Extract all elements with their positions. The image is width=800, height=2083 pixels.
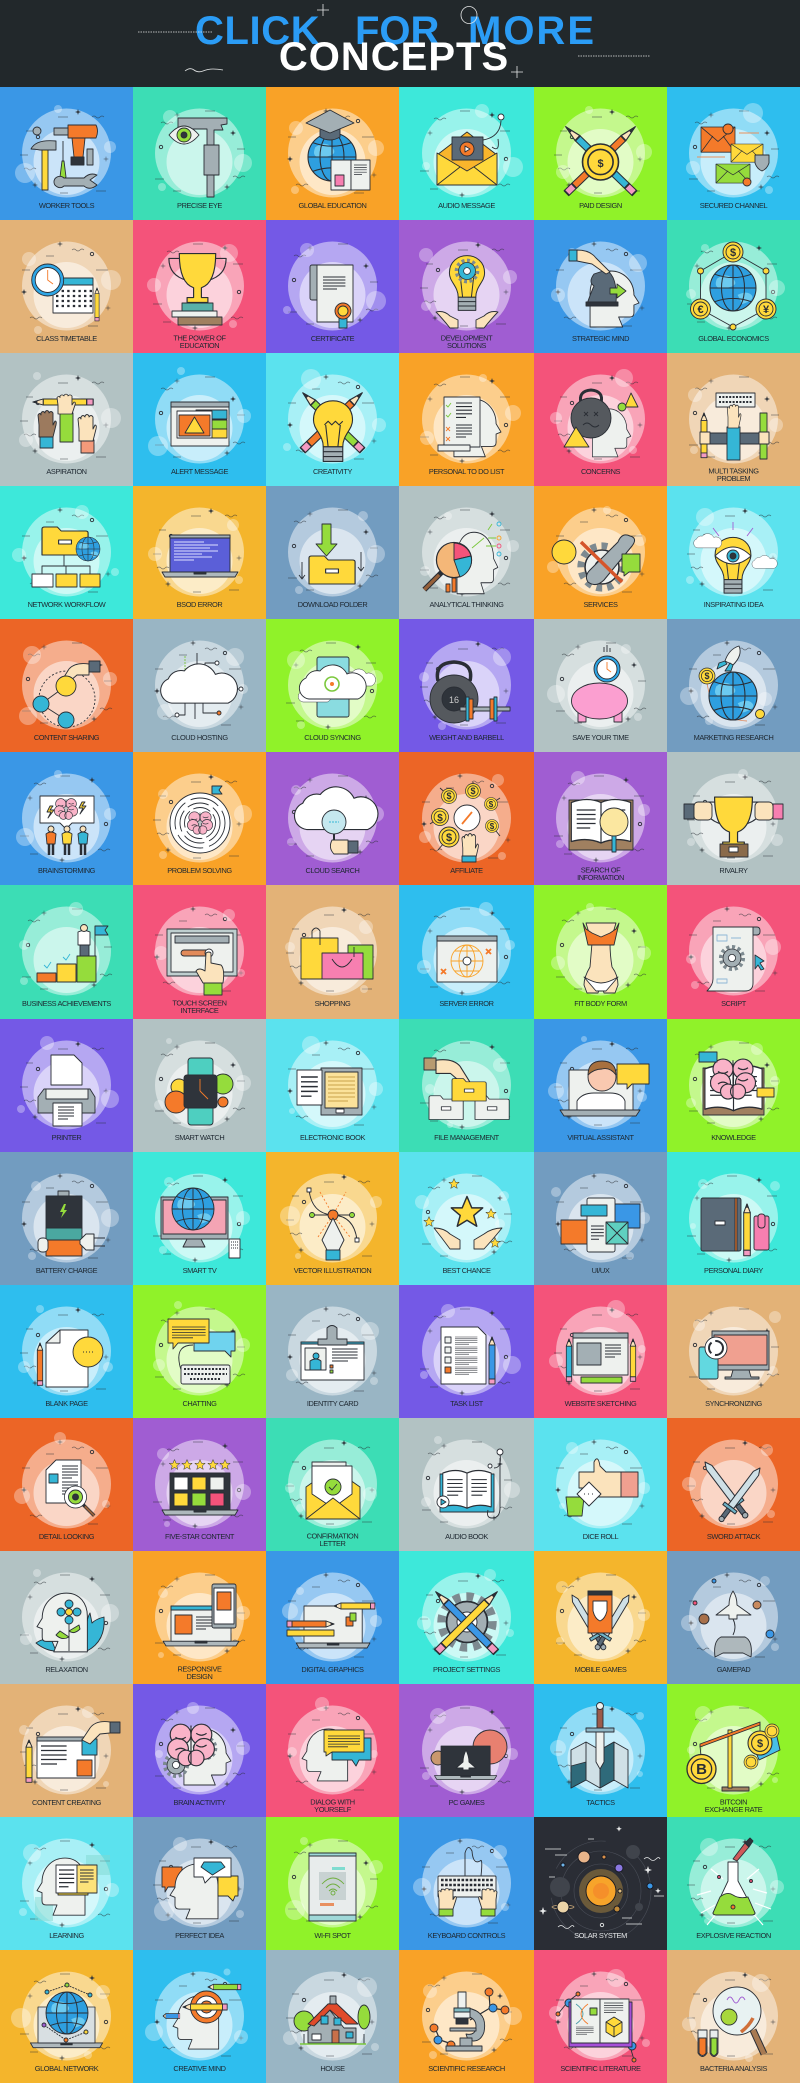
label: CREATIVE MIND xyxy=(173,2064,226,2073)
icon: ui devices xyxy=(561,1198,640,1252)
label: BRAINSTORMING xyxy=(38,866,96,875)
label: DEVELOPMENT xyxy=(441,334,493,343)
label line 2: LETTER xyxy=(320,1539,346,1548)
panel: keyboard controls xyxy=(399,1817,534,1951)
panel: services xyxy=(534,486,667,620)
icon: head target pencil xyxy=(163,1984,241,2049)
label: DETAIL LOOKING xyxy=(39,1532,95,1541)
panel: smart watch xyxy=(133,1019,266,1153)
label: ELECTRONIC BOOK xyxy=(300,1133,365,1142)
label: ALERT MESSAGE xyxy=(171,467,228,476)
icon: clock and calendar xyxy=(32,264,99,321)
panel: cloud search xyxy=(266,752,400,886)
icon: certificate xyxy=(310,265,353,328)
panel: aspiration xyxy=(0,353,133,487)
icon: folder network xyxy=(32,527,100,587)
panel: download folder xyxy=(266,486,400,620)
panel: relaxation xyxy=(0,1551,133,1685)
panel: scientific literature xyxy=(534,1950,667,2083)
icon: diary pen xyxy=(701,1198,769,1256)
icon: assistant on laptop xyxy=(560,1061,649,1116)
label: BLANK PAGE xyxy=(45,1399,88,1408)
icon: script scroll with gear xyxy=(707,927,764,991)
icon: balance with coins xyxy=(687,1722,780,1791)
icon: globe with currencies xyxy=(690,242,776,330)
label line 2: INTERFACE xyxy=(181,1006,219,1015)
label: PAID DESIGN xyxy=(579,201,622,210)
icon: globe with currencies: $ xyxy=(730,247,736,259)
label line 2: PROBLEM xyxy=(717,474,750,483)
icon: head and book xyxy=(35,1855,110,1921)
icon: hands keyboard pencil ruler xyxy=(700,393,769,460)
icon: coins and link: $ xyxy=(446,791,452,801)
panel: creativity xyxy=(266,353,400,487)
icon: fit torso xyxy=(583,923,619,993)
panel: bitcoin exchange rate xyxy=(667,1684,800,1818)
icon: chat bubbles and keyboard xyxy=(168,1319,235,1384)
panel: five-star content xyxy=(133,1418,266,1552)
title: click for more: CLICK xyxy=(195,9,320,53)
label: SCIENTIFIC LITERATURE xyxy=(560,2064,641,2073)
label: MULTI TASKING xyxy=(708,467,759,476)
panel: cloud syncing xyxy=(266,619,400,753)
icon: pen pencil coin: $ xyxy=(597,158,604,170)
label: CLASS TIMETABLE xyxy=(36,334,97,343)
panel: business achievements xyxy=(0,885,133,1019)
label: SYNCHRONIZING xyxy=(705,1399,763,1408)
label: IDENTITY CARD xyxy=(307,1399,358,1408)
icon: hand rolling dice xyxy=(566,1459,638,1516)
label line 2: EDUCATION xyxy=(180,341,219,350)
icon: globe with currencies: ¥ xyxy=(763,304,770,316)
icon: maze brain flag xyxy=(170,786,230,853)
label: CONTENT CREATING xyxy=(32,1798,102,1807)
panel: network workflow xyxy=(0,486,133,620)
panel: worker tools xyxy=(0,87,133,221)
panel: shopping xyxy=(266,885,400,1019)
panel: content creating xyxy=(0,1684,133,1818)
panel: mobile games xyxy=(534,1551,667,1685)
panel: multi tasking problem xyxy=(667,353,800,487)
icon: raised hands and pencil xyxy=(33,394,96,453)
label: AUDIO BOOK xyxy=(445,1532,488,1541)
icon: smart tv and globe xyxy=(161,1188,240,1258)
icon: id card xyxy=(301,1326,364,1380)
icon: tablet wifi xyxy=(309,1853,356,1921)
panel: synchronizing xyxy=(667,1285,800,1419)
panel: affiliate xyxy=(399,752,534,886)
label: PERSONAL TO DO LIST xyxy=(429,467,505,476)
panel: blank page xyxy=(0,1285,133,1419)
icon: people and idea xyxy=(40,796,94,855)
icon: balance with coins: B xyxy=(696,1761,707,1778)
icon: laptop, planets, rocket xyxy=(431,1730,507,1780)
panel: the power of education xyxy=(133,220,266,354)
label: BUSINESS ACHIEVEMENTS xyxy=(22,999,111,1008)
label: AUDIO MESSAGE xyxy=(438,201,495,210)
icon: bulb with crossed pencils xyxy=(300,390,365,461)
panel: solar system xyxy=(534,1817,667,1951)
panel: dialog with yourself xyxy=(266,1684,400,1818)
label line 2: SOLUTIONS xyxy=(447,341,487,350)
label: WEBSITE SKETCHING xyxy=(565,1399,637,1408)
label: SEARCH OF xyxy=(581,866,621,875)
label: GLOBAL EDUCATION xyxy=(299,201,367,210)
panel: project settings xyxy=(399,1551,534,1685)
icon: coins and link xyxy=(430,782,500,862)
label: SHOPPING xyxy=(315,999,351,1008)
label: FIT BODY FORM xyxy=(574,999,627,1008)
icon: responsive devices xyxy=(163,1584,239,1646)
panel: certificate xyxy=(266,220,400,354)
label: VIRTUAL ASSISTANT xyxy=(567,1133,634,1142)
icon: bulb with eye and clouds xyxy=(694,522,777,593)
icon: map and sword xyxy=(571,1702,628,1788)
label: VECTOR ILLUSTRATION xyxy=(294,1266,371,1275)
panel: touch screen interface xyxy=(133,885,266,1019)
icon: head, brain, gears xyxy=(165,1724,231,1785)
label: HOUSE xyxy=(320,2064,345,2073)
label: BACTERIA ANALYSIS xyxy=(700,2064,767,2073)
panel: task list xyxy=(399,1285,534,1419)
icon: globe, cap, book xyxy=(306,110,370,190)
panel: detail looking xyxy=(0,1418,133,1552)
icon: coins and link: $ xyxy=(446,832,452,844)
label: PROBLEM SOLVING xyxy=(167,866,232,875)
label: WEIGHT AND BARBELL xyxy=(429,733,504,742)
label: SECURED CHANNEL xyxy=(700,201,768,210)
icon: head and dialog xyxy=(302,1729,371,1781)
panel: bacteria analysis xyxy=(667,1950,800,2083)
label: CHATTING xyxy=(182,1399,217,1408)
panel: server error xyxy=(399,885,534,1019)
panel: save your time xyxy=(534,619,667,753)
icon: trophy held by two hands xyxy=(684,797,783,857)
header ornaments xyxy=(138,4,650,78)
panel: sword attack xyxy=(667,1418,800,1552)
label: CLOUD SEARCH xyxy=(306,866,360,875)
panel: identity card xyxy=(266,1285,400,1419)
label: DIALOG WITH xyxy=(310,1798,355,1807)
label: SERVICES xyxy=(583,600,618,609)
label: RESPONSIVE xyxy=(177,1665,222,1674)
panel: cloud hosting xyxy=(133,619,266,753)
label: PROJECT SETTINGS xyxy=(433,1665,500,1674)
panel: fit body form xyxy=(534,885,667,1019)
icon: spaceship and gamepad xyxy=(693,1579,774,1657)
panel: personal diary xyxy=(667,1152,800,1286)
label: PC GAMES xyxy=(449,1798,485,1807)
label: BSOD ERROR xyxy=(177,600,222,609)
label: TACTICS xyxy=(586,1798,615,1807)
icon: kettlebell and warning xyxy=(564,390,638,457)
label: SCIENTIFIC RESEARCH xyxy=(428,2064,505,2073)
icon: head with chess knight xyxy=(569,250,639,327)
label: WORKER TOOLS xyxy=(39,201,95,210)
panel: audio message xyxy=(399,87,534,221)
panel: wi-fi spot xyxy=(266,1817,400,1951)
label: AFFILIATE xyxy=(450,866,483,875)
icon: task list page xyxy=(441,1327,495,1384)
label: PERSONAL DIARY xyxy=(704,1266,763,1275)
icon: star in hands xyxy=(424,1178,502,1249)
panel: bsod error xyxy=(133,486,266,620)
panel: precise eye xyxy=(133,87,266,221)
panel: perfect idea xyxy=(133,1817,266,1951)
label: DIGITAL GRAPHICS xyxy=(301,1665,364,1674)
panel: weight and barbell xyxy=(399,619,534,753)
panel: explosive reaction xyxy=(667,1817,800,1951)
label: SMART TV xyxy=(183,1266,217,1275)
panel: brain activity xyxy=(133,1684,266,1818)
icon: house with trees xyxy=(294,1996,370,2044)
panel: dice roll xyxy=(534,1418,667,1552)
icon: phone and swords xyxy=(566,1591,635,1653)
label: SOLAR SYSTEM xyxy=(574,1931,627,1940)
header band xyxy=(0,0,800,88)
panel: inspirating idea xyxy=(667,486,800,620)
label: STRATEGIC MIND xyxy=(572,334,629,343)
label: RELAXATION xyxy=(45,1665,88,1674)
panel: paid design xyxy=(534,87,667,221)
label: ASPIRATION xyxy=(46,467,87,476)
panel: knowledge xyxy=(667,1019,800,1153)
icon: website sketch xyxy=(566,1333,636,1383)
title: click for more: MORE xyxy=(468,9,596,53)
icon: balance with coins: $ xyxy=(757,1738,763,1750)
label: PRECISE EYE xyxy=(177,201,222,210)
panel: electronic book xyxy=(266,1019,400,1153)
panel: global network xyxy=(0,1950,133,2083)
icon: coins and link: $ xyxy=(490,822,495,831)
icon: document magnifier xyxy=(46,1460,94,1516)
panel: creative mind xyxy=(133,1950,266,2083)
icon: piggy bank and clock xyxy=(572,645,628,722)
panel: class timetable xyxy=(0,220,133,354)
label: SWORD ATTACK xyxy=(707,1532,761,1541)
label: CONCERNS xyxy=(581,467,621,476)
panel: ui/ux xyxy=(534,1152,667,1286)
panel: personal to do list xyxy=(399,353,534,487)
label: EXPLOSIVE REACTION xyxy=(696,1931,771,1940)
label: TOUCH SCREEN xyxy=(172,999,227,1008)
label: CERTIFICATE xyxy=(311,334,355,343)
label: BRAIN ACTIVITY xyxy=(174,1798,226,1807)
icon: audio book xyxy=(437,1449,503,1518)
icon: bulb gear hands xyxy=(436,256,498,328)
icon: cloud and magnifier xyxy=(294,787,378,854)
panel: rivalry xyxy=(667,752,800,886)
title: click for more: FOR xyxy=(355,9,440,53)
panel: alert message xyxy=(133,353,266,487)
label: MARKETING RESEARCH xyxy=(694,733,773,742)
icon: coins and link: $ xyxy=(470,786,476,796)
icon: hand and nodes xyxy=(33,661,100,728)
icon: folders and hand xyxy=(424,1058,509,1120)
panel: global education xyxy=(266,87,400,221)
icon: vector pen nib xyxy=(307,1188,359,1260)
label: THE POWER OF xyxy=(173,334,227,343)
icon: book with dna and cube xyxy=(556,1992,636,2062)
icon: five stars laptop xyxy=(162,1460,238,1515)
panel: confirmation letter xyxy=(266,1418,400,1552)
label: SMART WATCH xyxy=(175,1133,224,1142)
icon: coins and link: $ xyxy=(437,813,443,824)
panel: secured channel xyxy=(667,87,800,221)
panel: chatting xyxy=(133,1285,266,1419)
icon: battery and plug xyxy=(38,1191,105,1256)
icon: digital graphics xyxy=(287,1603,375,1648)
label: BITCOIN xyxy=(720,1798,747,1807)
label: TASK LIST xyxy=(450,1399,484,1408)
label: INSPIRATING IDEA xyxy=(704,600,764,609)
label: PERFECT IDEA xyxy=(175,1931,224,1940)
label: CONFIRMATION xyxy=(307,1532,358,1541)
panel: pc games xyxy=(399,1684,534,1818)
label: PRINTER xyxy=(52,1133,81,1142)
label: GAMEPAD xyxy=(717,1665,750,1674)
icon: monitor sync phone xyxy=(699,1331,769,1379)
panel: battery charge xyxy=(0,1152,133,1286)
panel: development solutions xyxy=(399,220,534,354)
icon: book and brain xyxy=(699,1052,774,1115)
panel: smart tv xyxy=(133,1152,266,1286)
panel: strategic mind xyxy=(534,220,667,354)
icon: tablet and finger xyxy=(167,929,237,995)
label: FILE MANAGEMENT xyxy=(434,1133,500,1142)
panel: problem solving xyxy=(133,752,266,886)
panel: gamepad xyxy=(667,1551,800,1685)
icon: smart watch xyxy=(165,1058,233,1125)
label: KEYBOARD CONTROLS xyxy=(428,1931,506,1940)
label line 2: EXCHANGE RATE xyxy=(705,1805,763,1814)
icon: flask and pipette xyxy=(697,1838,771,1925)
label: MOBILE GAMES xyxy=(575,1665,627,1674)
panel: tactics xyxy=(534,1684,667,1818)
icon: microscope and molecules xyxy=(430,1988,509,2051)
icon: head with pie chart xyxy=(424,522,501,594)
icon: bacteria magnifier xyxy=(698,1987,764,2056)
panel: marketing research xyxy=(667,619,800,753)
icon: head, bubbles, diamond xyxy=(162,1858,238,1919)
label: UI/UX xyxy=(592,1266,610,1275)
label: GLOBAL NETWORK xyxy=(35,2064,99,2073)
panel: audio book xyxy=(399,1418,534,1552)
label: CLOUD SYNCING xyxy=(304,733,361,742)
icon: phone and cloud xyxy=(298,657,376,717)
panel: responsive design xyxy=(133,1551,266,1685)
panel: script xyxy=(667,885,800,1019)
label line 2: INFORMATION xyxy=(577,873,624,882)
label: RIVALRY xyxy=(719,866,748,875)
label: WI-FI SPOT xyxy=(314,1931,352,1940)
icon: head with flower xyxy=(36,1593,104,1652)
title: concepts: CONCEPTS xyxy=(279,35,509,79)
label: NETWORK WORKFLOW xyxy=(28,600,106,609)
icon: caliper and eye xyxy=(169,118,227,197)
icon: solar system xyxy=(539,1826,664,1941)
panel: printer xyxy=(0,1019,133,1153)
icon: download folder xyxy=(299,524,364,584)
panel: virtual assistant xyxy=(534,1019,667,1153)
icon: envelopes xyxy=(697,124,769,186)
icon: gear wrench screwdriver xyxy=(552,535,640,588)
icon: e-book tablet xyxy=(297,1068,362,1115)
panel: learning xyxy=(0,1817,133,1951)
label: SCRIPT xyxy=(721,999,747,1008)
panel: scientific research xyxy=(399,1950,534,2083)
label: CONTENT SHARING xyxy=(34,733,100,742)
panel: house xyxy=(266,1950,400,2083)
panel: search of information xyxy=(534,752,667,886)
label: KNOWLEDGE xyxy=(711,1133,756,1142)
icon: page with bubble xyxy=(37,1330,103,1387)
icon: envelope with video xyxy=(437,114,504,185)
label: CREATIVITY xyxy=(313,467,352,476)
panel: analytical thinking xyxy=(399,486,534,620)
panel: vector illustration xyxy=(266,1152,400,1286)
panel: concerns xyxy=(534,353,667,487)
label: BEST CHANCE xyxy=(442,1266,491,1275)
icon: trophy on books xyxy=(169,254,226,325)
label line 2: DESIGN xyxy=(187,1672,213,1681)
icon: globe rocket: $ xyxy=(704,671,710,681)
icon: globe with currencies: € xyxy=(697,304,704,316)
panel: digital graphics xyxy=(266,1551,400,1685)
icon: book and magnifier xyxy=(569,800,633,852)
icon: laptop with globe xyxy=(30,1983,103,2048)
panel: global economics xyxy=(667,220,800,354)
icon: coins and link: $ xyxy=(489,800,494,809)
label: SERVER ERROR xyxy=(439,999,494,1008)
label: FIVE-STAR CONTENT xyxy=(165,1532,235,1541)
panel: best chance xyxy=(399,1152,534,1286)
label: DOWNLOAD FOLDER xyxy=(298,600,367,609)
panel: brainstorming xyxy=(0,752,133,886)
label: CLOUD HOSTING xyxy=(171,733,228,742)
icon: server error window xyxy=(437,936,497,982)
icon: shopping bags xyxy=(301,928,373,979)
icon: crossed swords xyxy=(699,1457,766,1526)
icon: laptop blue screen xyxy=(162,535,238,577)
panel: website sketching xyxy=(534,1285,667,1419)
icon: gear and pencils xyxy=(433,1589,500,1654)
icon: printer xyxy=(38,1055,95,1126)
icon: head with list xyxy=(438,397,501,457)
panel: content sharing xyxy=(0,619,133,753)
icon: alert window xyxy=(171,402,229,446)
label: BATTERY CHARGE xyxy=(36,1266,98,1275)
label: ANALYTICAL THINKING xyxy=(430,600,504,609)
label line 2: YOURSELF xyxy=(314,1805,352,1814)
panel: file management xyxy=(399,1019,534,1153)
icon: cloud circuits xyxy=(161,653,243,719)
icon: creating a page xyxy=(26,1722,120,1782)
label: DICE ROLL xyxy=(583,1532,618,1541)
icon: tools xyxy=(31,125,98,190)
icon: steps and person with flag xyxy=(37,924,108,982)
icon: keyboard and hands xyxy=(438,1847,497,1916)
icon: confirmation envelope xyxy=(306,1462,360,1519)
label: LEARNING xyxy=(49,1931,84,1940)
label: GLOBAL ECONOMICS xyxy=(698,334,769,343)
label: SAVE YOUR TIME xyxy=(572,733,629,742)
icon: kettlebell and barbell: 16 xyxy=(449,695,459,705)
